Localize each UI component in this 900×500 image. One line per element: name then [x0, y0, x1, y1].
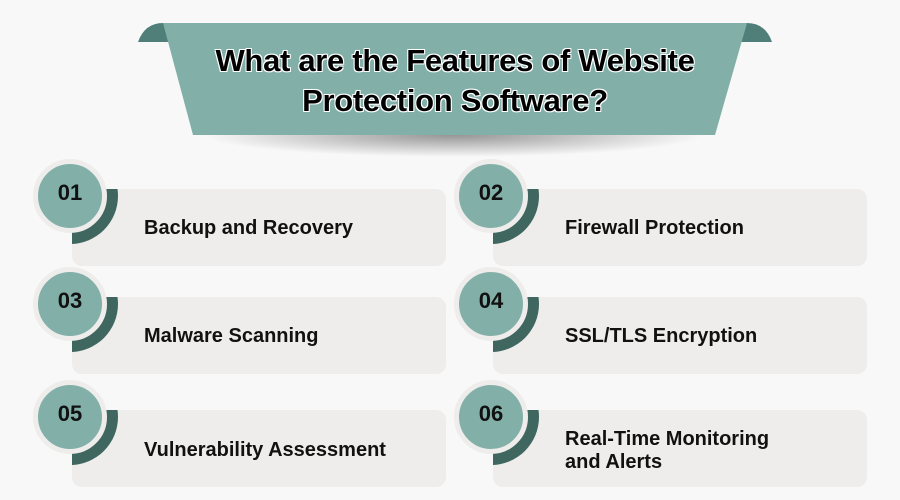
number 06 [454, 380, 528, 454]
card 06: Real-Time Monitoring [565, 428, 769, 450]
card 05: Vulnerability Assessment [144, 439, 386, 461]
card 03 [72, 297, 446, 374]
number 04: 04 [479, 288, 503, 313]
card 02 [493, 189, 867, 266]
card 04: SSL/TLS Encryption [565, 325, 757, 347]
card 01: Backup and Recovery [144, 217, 353, 239]
card 06 [493, 410, 867, 487]
number 01 [33, 159, 107, 233]
number 05 [33, 380, 107, 454]
number 05: 05 [58, 401, 82, 426]
number 02: 02 [479, 180, 503, 205]
banner title [138, 23, 772, 155]
card 02: Firewall Protection [565, 217, 744, 239]
card 03: Malware Scanning [144, 325, 318, 347]
card 05 [72, 410, 446, 487]
card 01 [72, 189, 446, 266]
number 06: 06 [479, 401, 503, 426]
number 04 [454, 267, 528, 341]
banner title: What are the Features of Website [215, 43, 695, 78]
number 01: 01 [58, 180, 82, 205]
banner title: Protection Software? [302, 83, 608, 118]
number 02 [454, 159, 528, 233]
card 04 [493, 297, 867, 374]
card 06: and Alerts [565, 451, 662, 473]
number 03: 03 [58, 288, 82, 313]
number 03 [33, 267, 107, 341]
